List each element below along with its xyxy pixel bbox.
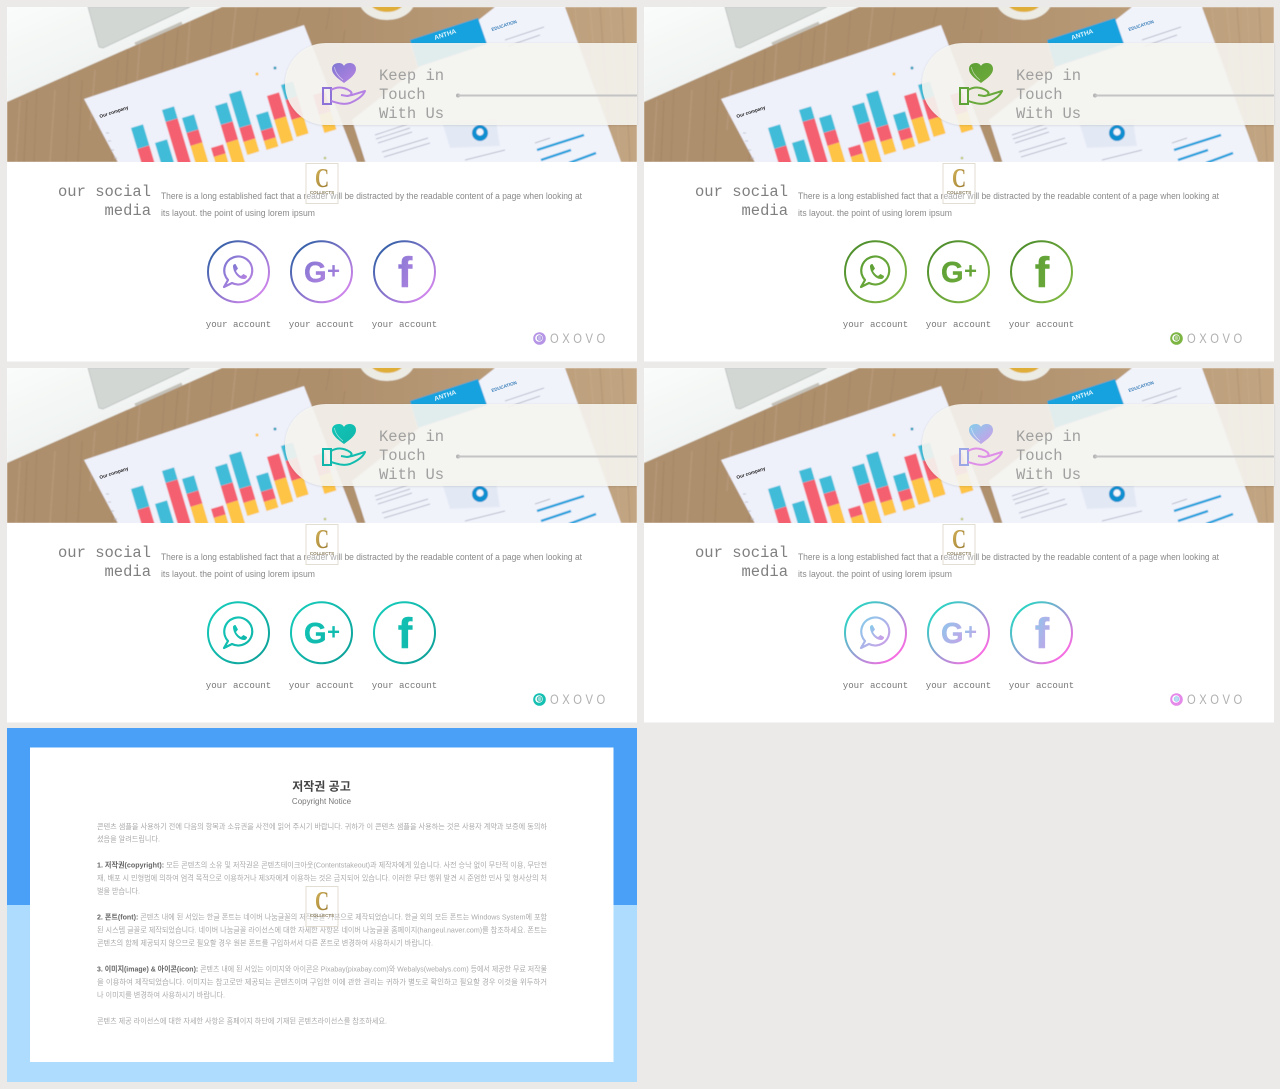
account labels: your account <box>289 680 354 691</box>
watermark logo: C <box>952 163 966 193</box>
photo: desk with charts <box>7 341 637 539</box>
account labels: your account <box>926 680 991 691</box>
icon: google plus: + <box>964 258 977 284</box>
watermark logo <box>943 524 975 564</box>
icon: google plus <box>928 241 989 302</box>
account labels: your account <box>1009 319 1074 330</box>
white notice panel <box>30 748 614 1062</box>
icon: google plus <box>291 602 352 663</box>
account labels: your account <box>289 319 354 330</box>
icon: facebook <box>1011 602 1072 663</box>
icon: heart in hand <box>960 424 1002 465</box>
icon: google plus: + <box>964 620 977 644</box>
account labels: your account <box>1009 680 1074 691</box>
icon: google plus: G <box>941 618 964 650</box>
notice subtitle: Copyright Notice <box>292 797 352 806</box>
icon: whatsapp <box>208 241 269 302</box>
photo captions: ANTHA <box>1070 28 1095 42</box>
pill connector line <box>456 454 637 458</box>
watermark logo: COLLECTS <box>947 551 971 556</box>
icon: google plus: + <box>327 620 340 644</box>
logo: oxovo: OXOVO <box>550 692 605 707</box>
logo: oxovo: OXOVO <box>550 331 605 346</box>
watermark logo <box>943 163 975 204</box>
account labels: your account <box>206 680 271 691</box>
icon: heart in hand <box>323 63 365 104</box>
icon: google plus <box>928 602 989 663</box>
photo captions: EDUCATION <box>491 380 517 393</box>
photo captions <box>736 19 1154 119</box>
section title: our social <box>58 544 151 562</box>
photo captions: ANTHA <box>433 28 458 42</box>
pill heading: Keep in <box>379 67 444 85</box>
section title: our social <box>695 544 788 562</box>
body text: its layout. the point of using lorem ipsum <box>798 208 952 218</box>
icon: facebook <box>374 602 435 663</box>
photo captions: ANTHA <box>1070 389 1095 403</box>
watermark logo: COLLECTS <box>310 551 334 556</box>
slide 2: green <box>644 0 1274 362</box>
icon: facebook <box>374 241 435 302</box>
icon: heart in hand <box>323 424 365 465</box>
icon: whatsapp <box>845 602 906 663</box>
slide 1: purple <box>7 0 637 362</box>
pill heading: With Us <box>379 105 444 123</box>
watermark logo: COLLECTS <box>310 913 334 918</box>
photo captions: Our company <box>99 466 129 480</box>
translucent pill <box>285 43 637 125</box>
body text: There is a long established fact that a reader will be distracted by the readable content of a page when looking at <box>798 191 1219 201</box>
icon: whatsapp <box>208 602 269 663</box>
pill heading: With Us <box>379 466 444 484</box>
slide background <box>644 368 1274 722</box>
icon: google plus: G <box>941 257 964 289</box>
photo captions: EDUCATION <box>1128 19 1154 32</box>
photo: desk with charts <box>644 0 1274 178</box>
notice title: 저작권 공고 <box>292 778 351 794</box>
section title: media <box>741 563 788 581</box>
section title: media <box>104 563 151 581</box>
icon: google plus: + <box>327 258 340 284</box>
icon: facebook: f <box>1035 249 1050 297</box>
body text: There is a long established fact that a reader will be distracted by the readable content of a page when looking at <box>161 191 582 201</box>
photo: desk with charts <box>644 341 1274 539</box>
pill heading: Touch <box>379 447 426 465</box>
icon: heart in hand <box>960 63 1002 104</box>
icon: facebook <box>1011 241 1072 302</box>
paragraph 1: copyright: 1. 저작권(copyright): 모든 콘텐츠의 소유 및 저작권은 콘텐츠테이크아웃(Contentstakeout)과 제작자에게 있습니다. 사전 승낙 없이 무단적 이용, 무단전 <box>97 860 568 870</box>
photo captions: Our company <box>736 466 766 480</box>
photo captions <box>99 380 517 480</box>
closing line: 콘텐츠 제공 라이선스에 대한 자세한 사항은 홈페이지 하단에 기재된 콘텐츠라이선스를 참조하세요. <box>97 1016 387 1026</box>
watermark logo: COLLECTS <box>310 190 334 195</box>
paragraph 3: image and icon: 을 이용하여 제작되었습니다. 이미지는 참고로만 제공되는 콘텐츠이며 구입한 이에 관한 권리는 귀하가 별도로 확인하고 필요할 경우 이것을 위두하거 <box>97 976 547 986</box>
pill connector line <box>1093 454 1274 458</box>
section title: our social <box>695 183 788 201</box>
pill heading: Touch <box>379 86 426 104</box>
photo: desk with charts <box>7 0 637 178</box>
photo captions: Our company <box>736 105 766 119</box>
slide background <box>7 368 637 722</box>
account labels: your account <box>926 319 991 330</box>
account labels: your account <box>372 680 437 691</box>
blue background upper <box>7 728 637 905</box>
photo captions: Our company <box>99 105 129 119</box>
icon: google plus <box>291 241 352 302</box>
pill heading: Keep in <box>379 428 444 446</box>
watermark logo <box>306 886 338 926</box>
slide 3: teal <box>7 341 637 722</box>
watermark logo: C <box>315 163 329 193</box>
slide background <box>644 7 1274 362</box>
icon: facebook: f <box>398 249 413 297</box>
watermark logo: C <box>315 886 329 916</box>
pill connector line <box>456 94 637 98</box>
body text: its layout. the point of using lorem ipsum <box>798 569 952 579</box>
section title: media <box>741 202 788 220</box>
paragraph 1: copyright: 벌을 받습니다. <box>97 886 140 896</box>
paragraph 2: font: 콘텐츠의 함께 제공되지 않으므로 필요할 경우 원본 폰트를 구입하셔서 다른 폰트로 변경하여 사용하시기 바랍니다. <box>97 938 433 948</box>
photo captions: EDUCATION <box>1128 380 1154 393</box>
pill heading: With Us <box>1016 466 1081 484</box>
photo captions <box>99 19 517 119</box>
watermark logo: C <box>315 524 329 554</box>
icon: facebook: f <box>398 610 413 658</box>
pill heading: With Us <box>1016 105 1081 123</box>
body text: its layout. the point of using lorem ipsum <box>161 569 315 579</box>
icon: whatsapp <box>845 241 906 302</box>
body text: There is a long established fact that a reader will be distracted by the readable content of a page when looking at <box>798 552 1219 562</box>
photo captions: ANTHA <box>433 389 458 403</box>
section title: our social <box>58 183 151 201</box>
translucent pill <box>922 404 1274 486</box>
slide 5: copyright notice <box>7 728 637 1082</box>
logo: oxovo: OXOVO <box>1187 692 1242 707</box>
paragraph 1: copyright: 재, 배포 시 민형법에 의하여 엄격 목적으로 이용하거나 제3자에게 이용하는 것은 금지되어 있습니다. 이러한 무단 행위 발견 시 준엄한 민사 및 형사상의 처 <box>97 872 547 882</box>
icon: google plus: G <box>304 618 327 650</box>
paragraph 2: font: 2. 폰트(font): 콘텐츠 내에 된 서있는 한글 폰트는 네이버 나눔글꼴의 저작물을 기본으로 제작되었습니다. 한글 외의 모든 폰트는 Windows System에 포함 <box>97 912 571 922</box>
icon: facebook: f <box>1035 610 1050 658</box>
translucent pill <box>922 43 1274 125</box>
light blue background lower <box>7 905 637 1082</box>
watermark logo: COLLECTS <box>947 190 971 195</box>
paragraph 3: image and icon: 나 이미지를 변경하여 사용하시기 바랍니다. <box>97 990 225 1000</box>
translucent pill <box>285 404 637 486</box>
icon: google plus: G <box>304 257 327 289</box>
pill heading: Keep in <box>1016 428 1081 446</box>
slide 4: aqua to pink <box>644 341 1274 722</box>
account labels: your account <box>206 319 271 330</box>
pill heading: Touch <box>1016 447 1063 465</box>
paragraph 2: font: 된 시스템 글꼴로 제작되었습니다. 네이버 나눔글꼴 라이선스에 대한 자세한 사항은 네이버 나눔글꼴 홈페이지(hangeul.naver.com)를 참조하세요. 폰트는 <box>97 924 547 934</box>
body text: its layout. the point of using lorem ipsum <box>161 208 315 218</box>
intro paragraph: 셨음을 알려드립니다. <box>97 834 160 844</box>
intro paragraph: 콘텐츠 샘플을 사용하기 전에 다음의 항목과 소유권을 사전에 읽어 주시기 바랍니다. 귀하가 이 콘텐츠 샘플을 사용하는 것은 사용자 계약과 보증에 동의하 <box>97 821 547 831</box>
pill connector line <box>1093 94 1274 98</box>
account labels: your account <box>372 319 437 330</box>
watermark logo <box>306 163 338 204</box>
pill heading: Keep in <box>1016 67 1081 85</box>
pill heading: Touch <box>1016 86 1063 104</box>
watermark logo: C <box>952 524 966 554</box>
body text: There is a long established fact that a reader will be distracted by the readable content of a page when looking at <box>161 552 582 562</box>
account labels: your account <box>843 680 908 691</box>
section title: media <box>104 202 151 220</box>
photo captions <box>736 380 1154 480</box>
photo captions: EDUCATION <box>491 19 517 32</box>
paragraph 3: image and icon: 3. 이미지(image) & 아이콘(icon): 콘텐츠 내에 된 서있는 이미지와 아이콘은 Pixabay(pixabay.com)와 Webalys(webalys.com) 등에서 제공한 무료 저작물 <box>97 964 574 974</box>
slide background <box>7 7 637 362</box>
account labels: your account <box>843 319 908 330</box>
watermark logo <box>306 524 338 564</box>
logo: oxovo: OXOVO <box>1187 331 1242 346</box>
